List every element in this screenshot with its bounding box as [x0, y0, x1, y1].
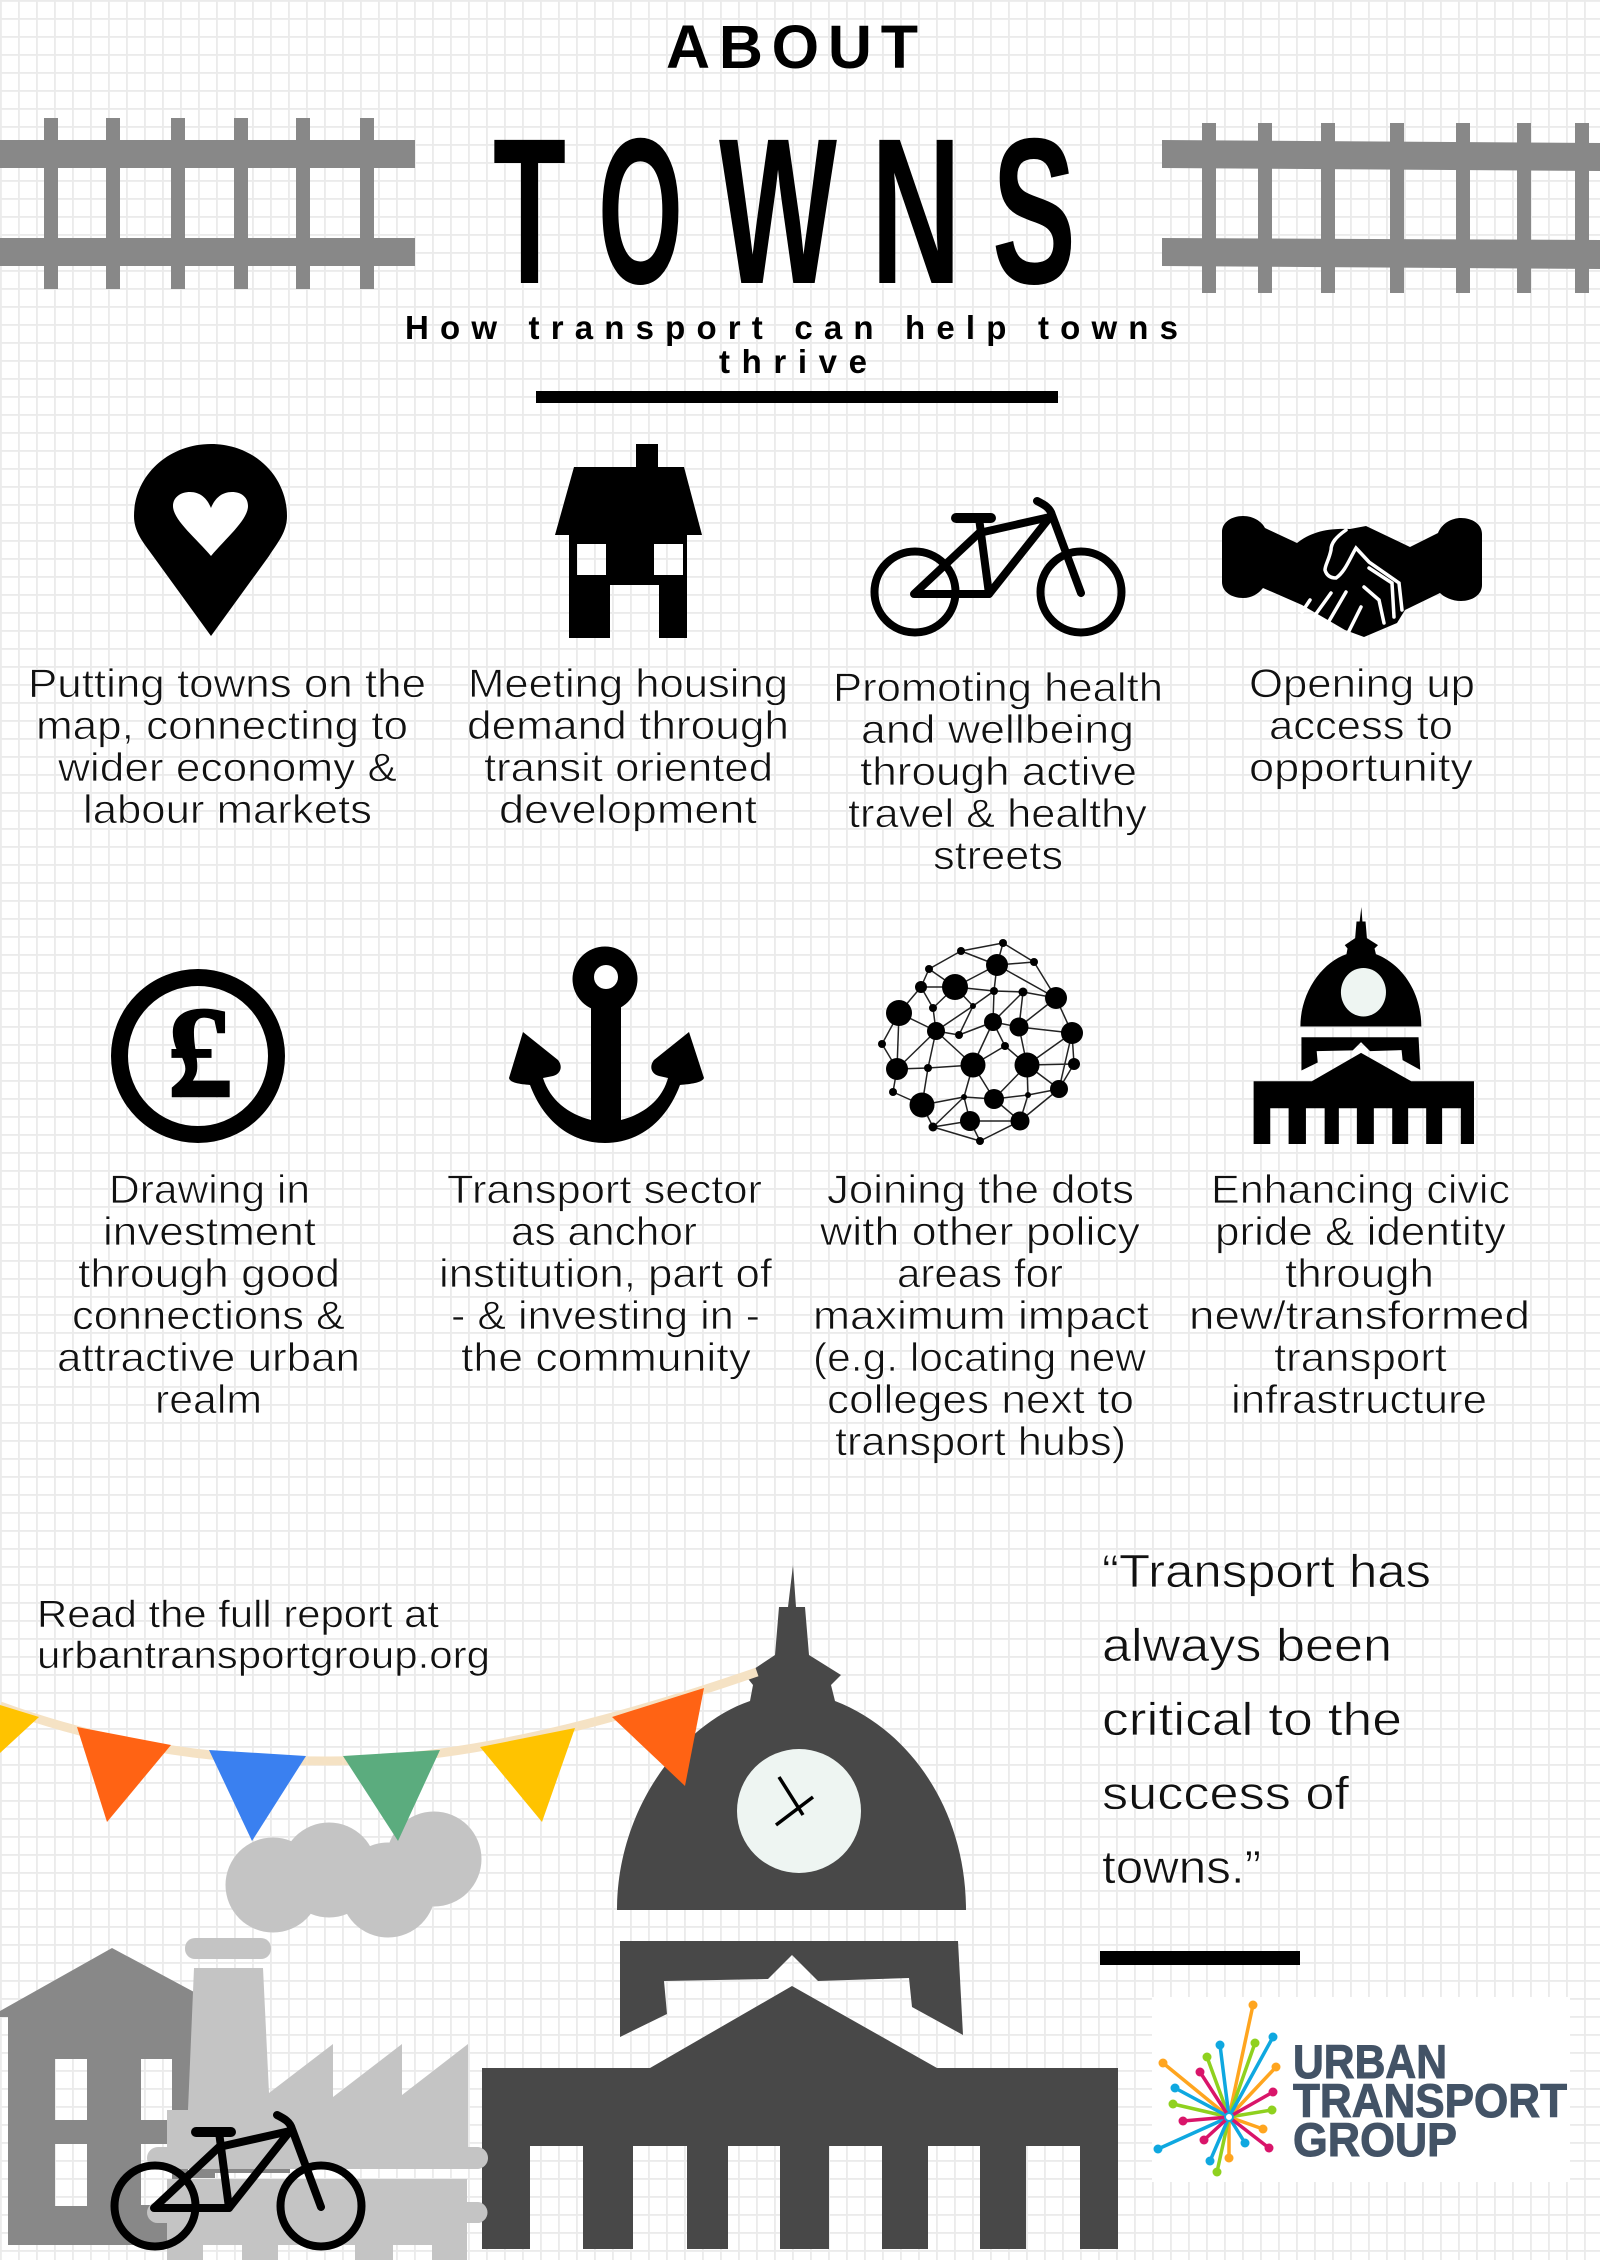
text: read the full report: Read the full report at [37, 1594, 439, 1636]
text: putting towns on the map: map, connecting to [36, 704, 408, 748]
text: meeting housing demand [467, 662, 789, 832]
text: putting towns on the map [28, 662, 426, 832]
title underline bar [536, 391, 1058, 403]
bunting string and flags [0, 1672, 757, 1841]
text: meeting housing demand: development [499, 788, 757, 832]
text: joining the dots: with other policy [819, 1210, 1140, 1254]
text: opening up access: access to [1269, 704, 1453, 748]
title: towns [493, 96, 1076, 328]
title: towns: N [871, 96, 961, 328]
subtitle: thrive [719, 343, 867, 380]
text: enhancing civic pride: infrastructure [1231, 1378, 1487, 1422]
quote underline bar [1100, 1951, 1300, 1965]
text: transport sector as anchor: as anchor [511, 1210, 697, 1254]
title: towns: T [493, 96, 566, 328]
text: enhancing civic pride: transport [1274, 1336, 1447, 1380]
text: opening up access [1249, 662, 1475, 790]
text: putting towns on the map: labour markets [83, 788, 372, 832]
quote: always been [1102, 1619, 1392, 1671]
illustration: town hall building [482, 1565, 1118, 2249]
icon: map pin with heart [134, 444, 287, 636]
title: towns: O [598, 96, 683, 328]
text: putting towns on the map: wider economy & [57, 746, 397, 790]
text: promoting health: and wellbeing [861, 708, 1134, 752]
icon: connected dots network [878, 939, 1083, 1145]
text: drawing in investment: realm [155, 1378, 262, 1422]
text: meeting housing demand: transit oriented [484, 746, 773, 790]
factory bar ends over building [477, 2147, 488, 2223]
text: meeting housing demand: demand through [467, 704, 789, 748]
icon: house [555, 444, 702, 638]
text: opening up access: opportunity [1249, 746, 1473, 790]
icon: pound coin: £ [168, 981, 232, 1125]
illustration: bicycle in town [114, 2115, 362, 2246]
quote: success of [1102, 1767, 1349, 1819]
text: putting towns on the map: Putting towns on the [28, 662, 426, 706]
quote [1102, 1545, 1431, 1893]
text: transport sector as anchor: institution, part of [439, 1252, 773, 1296]
quote: “Transport has [1102, 1545, 1431, 1597]
text: drawing in investment: Drawing in [109, 1168, 310, 1212]
quote: critical to the [1102, 1693, 1402, 1745]
text: joining the dots: transport hubs) [835, 1420, 1126, 1464]
icon: civic building [1254, 907, 1474, 1144]
icon: handshake [1222, 516, 1482, 637]
text: read the full report [37, 1594, 490, 1677]
quote: towns.” [1102, 1841, 1261, 1893]
text: transport sector as anchor: Transport sector [447, 1168, 762, 1212]
text: drawing in investment: connections & [72, 1294, 345, 1338]
subtitle [405, 309, 1178, 380]
text: drawing in investment: attractive urban [57, 1336, 360, 1380]
title: towns: W [719, 96, 837, 328]
icon: bicycle [874, 501, 1122, 632]
heading: about: ABOUT [666, 13, 918, 81]
text: opening up access: Opening up [1249, 662, 1475, 706]
logo: urban transport group: TRANSPORT [1293, 2074, 1567, 2127]
text: joining the dots: colleges next to [827, 1378, 1134, 1422]
subtitle: How transport can help towns [405, 309, 1178, 346]
text: drawing in investment [57, 1168, 360, 1422]
text: promoting health: Promoting health [833, 666, 1163, 710]
text: enhancing civic pride: Enhancing civic [1211, 1168, 1510, 1212]
text: read the full report: urbantransportgroup.org [37, 1635, 490, 1677]
icon: anchor [509, 946, 704, 1143]
text: joining the dots: (e.g. locating new [813, 1336, 1146, 1380]
logo: urban transport group: GROUP [1293, 2113, 1457, 2166]
text: transport sector as anchor: - & investing in - [451, 1294, 760, 1338]
text: enhancing civic pride: through [1285, 1252, 1434, 1296]
text: promoting health: streets [933, 834, 1063, 878]
text: joining the dots [813, 1168, 1149, 1464]
text: joining the dots: maximum impact [813, 1294, 1149, 1338]
text: drawing in investment: investment [103, 1210, 316, 1254]
illustration: smoke cloud [226, 1812, 482, 1938]
text: enhancing civic pride: new/transformed [1189, 1294, 1530, 1338]
text: promoting health [833, 666, 1163, 878]
railway track right [1162, 123, 1600, 293]
illustration: grey house [0, 1948, 194, 2245]
text: enhancing civic pride: pride & identity [1215, 1210, 1506, 1254]
text: promoting health: travel & healthy [848, 792, 1147, 836]
text: meeting housing demand: Meeting housing [468, 662, 788, 706]
logo: urban transport group [1152, 1997, 1570, 2182]
logo: urban transport group: URBAN [1293, 2035, 1447, 2088]
text: promoting health: through active [860, 750, 1137, 794]
illustration: factory [147, 1938, 488, 2260]
text: joining the dots: areas for [897, 1252, 1063, 1296]
text: drawing in investment: through good [78, 1252, 340, 1296]
text: enhancing civic pride [1189, 1168, 1530, 1422]
text: transport sector as anchor [439, 1168, 773, 1380]
text: joining the dots: Joining the dots [827, 1168, 1134, 1212]
icon: pound coin [120, 978, 276, 1134]
title: towns: S [992, 96, 1076, 328]
text: transport sector as anchor: the community [461, 1336, 751, 1380]
railway track left [0, 118, 415, 289]
